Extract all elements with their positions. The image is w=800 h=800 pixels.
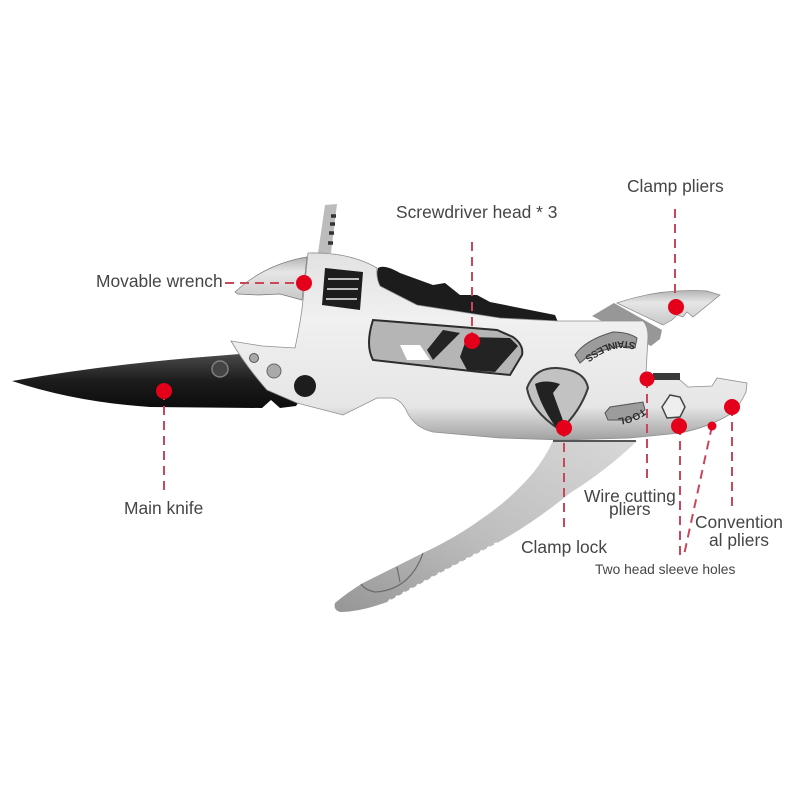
knife rivet xyxy=(212,361,228,377)
black rubber handle xyxy=(377,267,558,322)
callout: conventional pliers: al pliers xyxy=(709,530,769,550)
post threads xyxy=(328,216,336,243)
movable wrench jaw xyxy=(235,257,307,300)
callout: movable wrench xyxy=(96,271,312,291)
tool stamp: TOOL xyxy=(618,410,646,424)
callout: two head sleeve holes xyxy=(595,418,735,577)
screwdriver bits xyxy=(427,330,518,372)
jaw hole large xyxy=(267,364,281,378)
callout: wire cutting pliers: Wire cutting xyxy=(584,486,676,506)
shadow under body xyxy=(553,440,636,442)
upper plier strut xyxy=(592,303,662,346)
clamp lock lever xyxy=(535,382,565,426)
pivot screw xyxy=(294,375,316,397)
multi-tool illustration xyxy=(12,204,748,612)
adjuster wheel window xyxy=(322,268,363,310)
callout: two head sleeve holes: Two head sleeve holes xyxy=(595,562,735,577)
callout: clamp lock xyxy=(521,420,607,557)
callout: wire cutting pliers xyxy=(584,372,676,519)
callout: clamp pliers: Clamp pliers xyxy=(627,176,724,196)
callout: clamp lock: Clamp lock xyxy=(521,537,607,557)
blade tip engraving xyxy=(361,553,423,592)
stainless stamp: STAINLESS xyxy=(586,341,636,362)
tool stamp xyxy=(604,402,646,424)
callout: main knife xyxy=(124,383,203,518)
dark edge of lower jaw gap xyxy=(653,373,680,380)
stainless stamp xyxy=(574,332,638,364)
black main knife blade xyxy=(12,354,300,408)
main steel body xyxy=(231,253,747,440)
white gap in window xyxy=(400,345,430,360)
blade serration xyxy=(387,543,497,602)
callout: conventional pliers xyxy=(695,399,783,550)
adjuster wheel threads xyxy=(326,279,359,299)
upper plier jaw xyxy=(617,290,720,325)
callout: conventional pliers: Convention xyxy=(695,512,783,532)
hexagon sleeve hole xyxy=(662,395,685,418)
callout: wire cutting pliers: pliers xyxy=(609,499,651,519)
callout: clamp pliers xyxy=(627,176,724,315)
screw slot window xyxy=(369,320,522,375)
callout: screwdriver head: Screwdriver head * 3 xyxy=(396,202,557,222)
callout: main knife: Main knife xyxy=(124,498,203,518)
callout: movable wrench: Movable wrench xyxy=(96,271,223,291)
callout: screwdriver head xyxy=(396,202,557,349)
serrated lower blade xyxy=(335,441,637,612)
jaw hole small xyxy=(250,354,258,362)
clamp lock recess xyxy=(527,368,588,430)
adjuster screw post xyxy=(318,204,337,253)
